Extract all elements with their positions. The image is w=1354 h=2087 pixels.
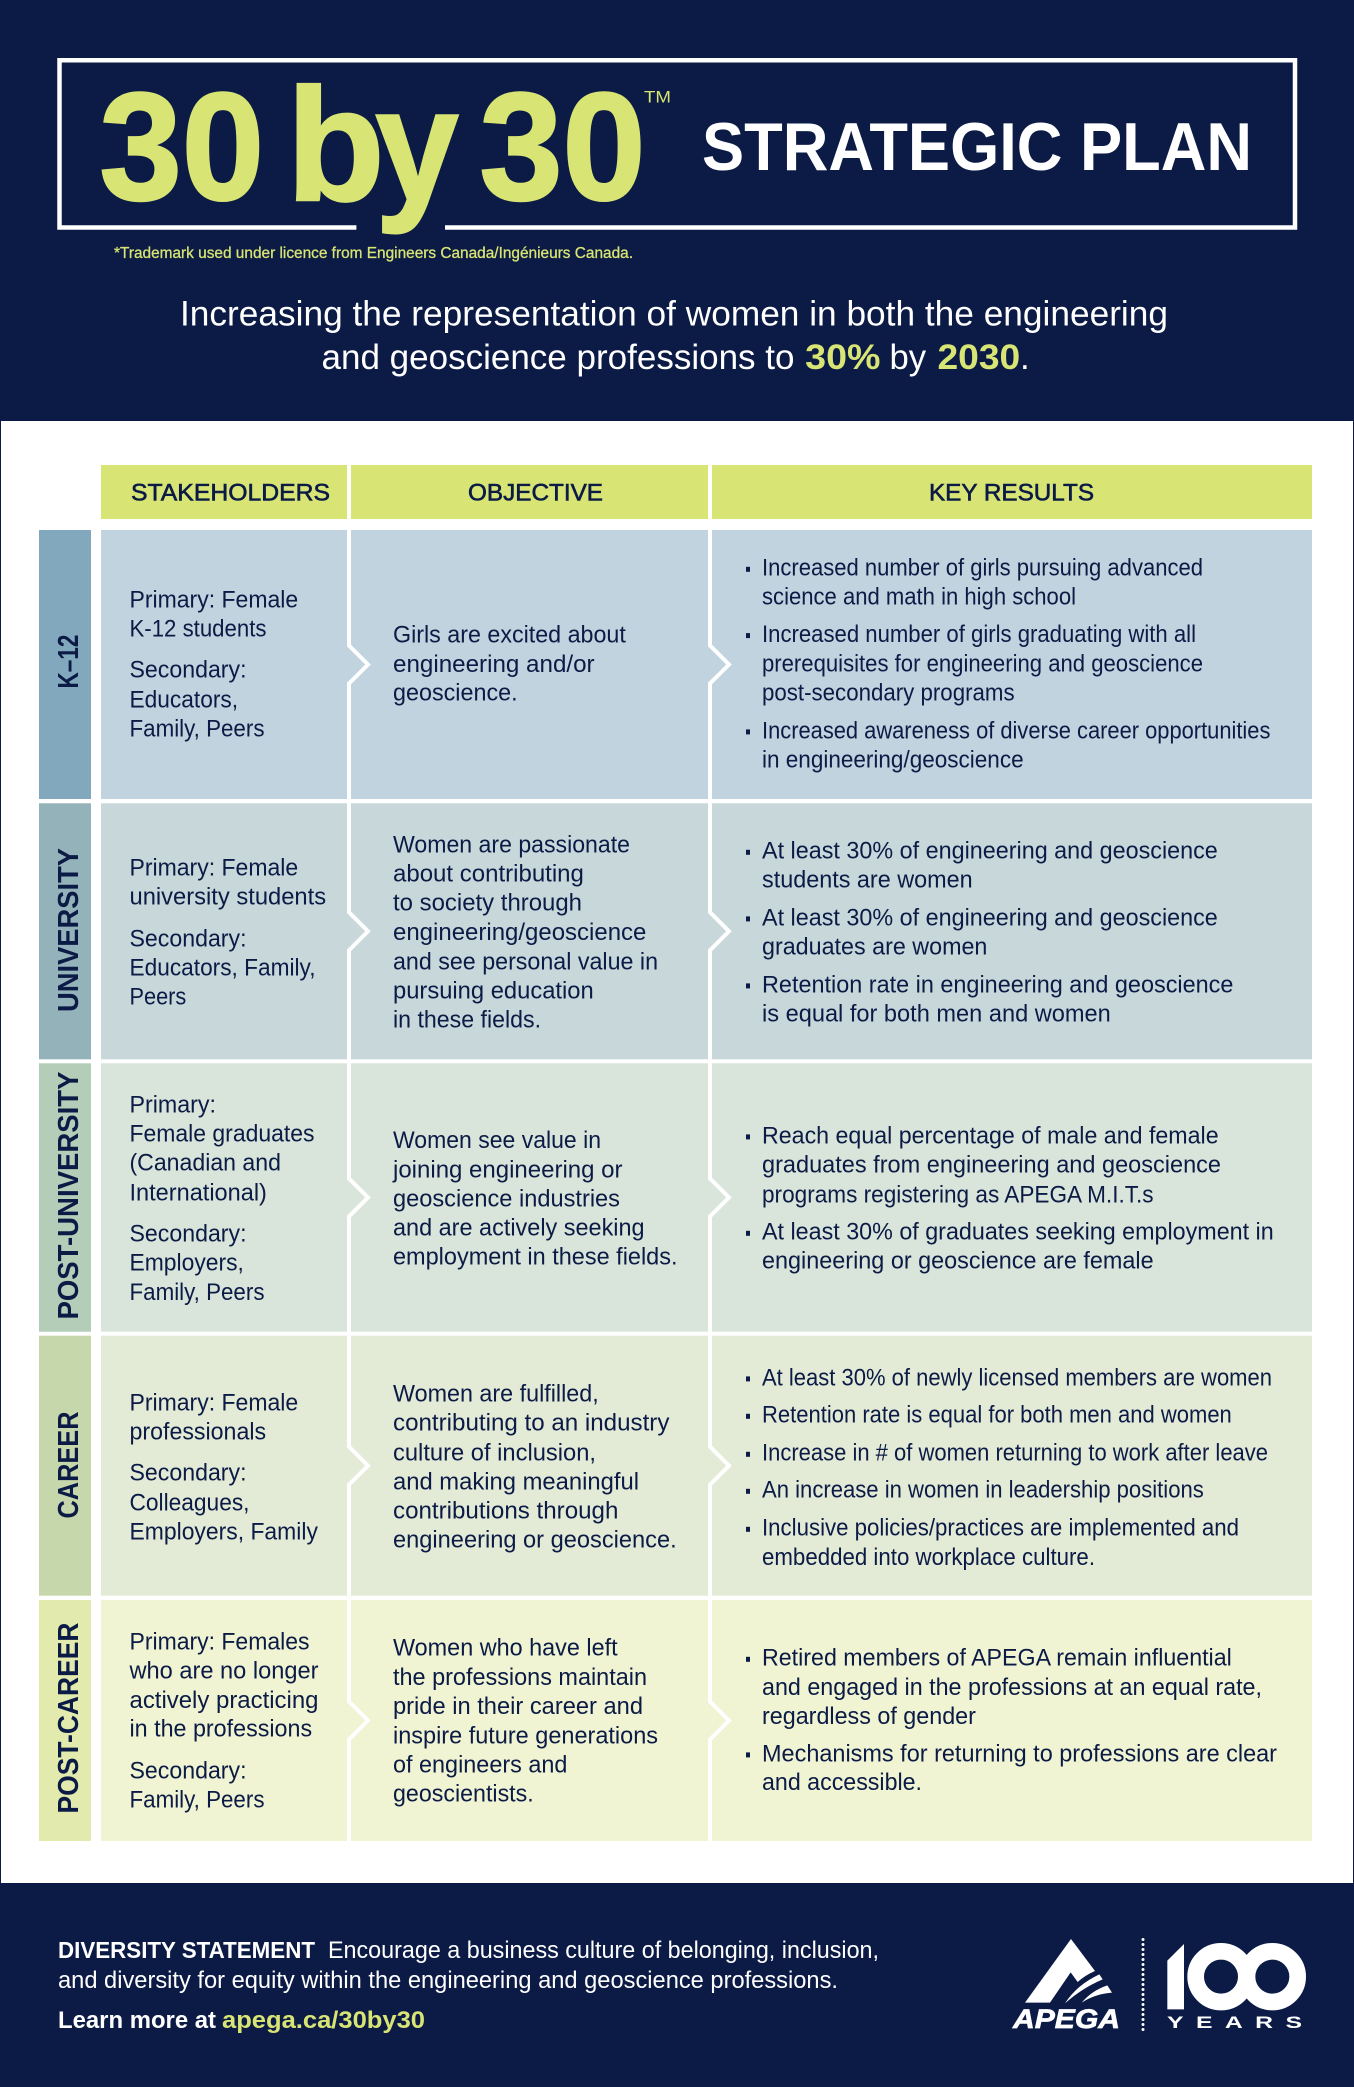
subtitle (180, 294, 1168, 377)
subtitle: 30% (805, 338, 880, 377)
key results list: programs registering as APEGA M.I.T.s (762, 1181, 1154, 1208)
objective text: geoscience industries (393, 1185, 620, 1212)
objective text: pride in their career and (393, 1693, 643, 1720)
key results list: Increased number of girls graduating with all (762, 621, 1196, 648)
stakeholders text: who are no longer (129, 1658, 318, 1685)
subtitle: . (1020, 338, 1030, 377)
stakeholders text (129, 1628, 318, 1814)
row label: Post-Career (39, 1600, 91, 1841)
stakeholders text: professionals (130, 1419, 266, 1446)
trademark note: *Trademark used under licence from Engineers Canada/Ingénieurs Canada. (114, 245, 633, 262)
title: strategic plan: STRATEGIC PLAN (702, 109, 1252, 185)
objective text: contributions through (393, 1498, 618, 1525)
stakeholders text (130, 855, 326, 1010)
title: 30 by 30: 30 (480, 61, 646, 232)
diversity statement: Encourage a business culture of belonging, inclusion, (328, 1937, 879, 1964)
key results list: and accessible. (762, 1769, 922, 1796)
icon: 100 years mark: YEARS (1167, 2014, 1302, 2032)
objective text: Women who have left (393, 1635, 618, 1662)
learn more link: apega.ca/30by30 (222, 2007, 425, 2034)
stakeholders text: Female graduates (130, 1121, 314, 1148)
stakeholders text: Educators, (130, 686, 238, 713)
key results list: Increased awareness of diverse career opportunities (762, 717, 1270, 744)
objective text: the professions maintain (393, 1664, 647, 1691)
stakeholders text: (Canadian and (130, 1150, 281, 1177)
objective text: geoscientists. (393, 1781, 534, 1808)
objective text: Girls are excited about (393, 622, 626, 649)
stakeholders text: Primary: Female (130, 587, 298, 614)
icon: APEGA logo: APEGA (1012, 2004, 1120, 2034)
column header: stakeholders (101, 465, 347, 519)
objective text (392, 1127, 678, 1270)
stakeholders text: Colleagues, (130, 1489, 250, 1516)
column header: objective: OBJECTIVE (468, 479, 603, 506)
key results list: Mechanisms for returning to professions are clear (762, 1740, 1277, 1767)
stakeholders text: Peers (130, 983, 186, 1010)
stakeholders text (130, 1091, 314, 1306)
chevron dividers (349, 803, 729, 1059)
key results list (746, 1364, 1272, 1571)
learn more link: Learn more at (58, 2007, 216, 2034)
diversity statement: and diversity for equity within the engineering and geoscience professions. (58, 1967, 838, 1994)
learn more link (58, 2007, 425, 2034)
subtitle: and geoscience professions to (322, 338, 794, 377)
row label: K-12: K–12 (53, 634, 85, 688)
stakeholders text: actively practicing (130, 1687, 318, 1714)
title: 30 by 30: y (376, 55, 459, 234)
objective text: culture of inclusion, (393, 1440, 596, 1467)
stakeholders text: Secondary: (130, 656, 246, 683)
key results list: students are women (762, 867, 973, 894)
key results list: is equal for both men and women (762, 1000, 1111, 1027)
title: 30 by 30: TM (644, 88, 671, 107)
row label: Post-University: POST-UNIVERSITY (53, 1072, 85, 1320)
key results list: in engineering/geoscience (762, 747, 1024, 774)
key results list: At least 30% of engineering and geoscience (762, 838, 1218, 865)
key results list: regardless of gender (762, 1703, 976, 1730)
stakeholders text: Secondary: (130, 1460, 246, 1487)
stakeholders text (130, 587, 298, 742)
objective text: Women are passionate (393, 831, 630, 858)
row label: Career (39, 1336, 91, 1596)
title: 30 by 30: 30 (100, 61, 264, 232)
subtitle: 2030 (938, 338, 1020, 377)
subtitle: by (890, 338, 927, 377)
stakeholders text: Primary: Females (130, 1628, 310, 1655)
stakeholders text: Employers, (130, 1250, 244, 1277)
cell background (101, 1336, 1312, 1596)
key results list: graduates from engineering and geoscience (762, 1152, 1221, 1179)
stakeholders text: Secondary: (130, 1757, 246, 1784)
key results list: engineering or geoscience are female (762, 1248, 1154, 1275)
stakeholders text: Family, Peers (130, 1787, 264, 1814)
stakeholders text: Primary: Female (130, 855, 298, 882)
objective text: of engineers and (393, 1752, 567, 1779)
diversity statement (58, 1937, 879, 1994)
key results list: Retention rate is equal for both men and women (762, 1402, 1232, 1429)
key results list: science and math in high school (762, 584, 1076, 611)
row: Career (39, 1336, 1312, 1596)
title frame (60, 60, 1295, 228)
stakeholders text: Employers, Family (130, 1519, 318, 1546)
column header: objective (351, 465, 708, 519)
key results list: Increased number of girls pursuing advanced (762, 555, 1203, 582)
title: 30 by 30: b (287, 55, 385, 234)
stakeholders text: Primary: Female (130, 1389, 298, 1416)
stakeholders text: Secondary: (130, 926, 246, 953)
key results list (746, 1122, 1274, 1275)
objective text (393, 1635, 658, 1808)
stakeholders text: Educators, Family, (130, 955, 316, 982)
key results list: An increase in women in leadership positions (762, 1477, 1204, 1504)
stakeholders text: K-12 students (130, 616, 266, 643)
cell background (101, 803, 1312, 1059)
row: Post-Career (39, 1600, 1312, 1841)
objective text: engineering and/or (393, 651, 595, 678)
stakeholders text: university students (130, 884, 326, 911)
stakeholders text: Secondary: (130, 1220, 246, 1247)
objective text: engineering/geoscience (393, 919, 646, 946)
white table panel (1, 421, 1353, 1883)
objective text: and are actively seeking (393, 1215, 645, 1242)
stakeholders text: in the professions (130, 1716, 312, 1743)
cell background (101, 1600, 1312, 1841)
key results list: prerequisites for engineering and geoscience (762, 650, 1203, 677)
row label: Post-Career: POST-CAREER (53, 1622, 85, 1814)
objective text: and see personal value in (393, 949, 658, 976)
key results list: embedded into workplace culture. (762, 1544, 1095, 1571)
icon: APEGA logo (1012, 1939, 1120, 2034)
objective text: contributing to an industry (393, 1410, 669, 1437)
chevron dividers (349, 1336, 729, 1596)
table header row (101, 465, 1312, 519)
key results list (746, 838, 1233, 1027)
icon: 100 years mark (1167, 1944, 1302, 2032)
key results list: graduates are women (762, 933, 987, 960)
stakeholders text: Family, Peers (130, 715, 264, 742)
diversity statement: DIVERSITY STATEMENT (58, 1937, 315, 1963)
column header: stakeholders: STAKEHOLDERS (131, 479, 330, 506)
chevron dividers (349, 530, 729, 799)
key results list: Retention rate in engineering and geoscience (762, 971, 1233, 998)
row: Post-University (39, 1063, 1312, 1332)
row label: Career: CAREER (53, 1411, 85, 1518)
objective text: pursuing education (393, 977, 594, 1004)
key results list: At least 30% of graduates seeking employment in (762, 1219, 1274, 1246)
objective text: geoscience. (393, 680, 518, 707)
row label: University: UNIVERSITY (53, 848, 85, 1012)
stakeholders text: International) (130, 1179, 267, 1206)
title: 30 by 30 (100, 55, 671, 234)
objective text: employment in these fields. (393, 1243, 678, 1270)
objective text: Women are fulfilled, (393, 1381, 599, 1408)
key results list: and engaged in the professions at an equal rate, (762, 1674, 1262, 1701)
objective text: joining engineering or (392, 1156, 623, 1183)
key results list: At least 30% of engineering and geoscience (762, 904, 1218, 931)
cell background (101, 1063, 1312, 1332)
row label: Post-University (39, 1063, 91, 1332)
subtitle: Increasing the representation of women in both the engineering (180, 294, 1168, 333)
footer (58, 1937, 1302, 2034)
objective text (393, 1381, 677, 1553)
objective text (393, 622, 626, 707)
objective text: inspire future generations (393, 1722, 658, 1749)
cell background (101, 530, 1312, 799)
row: K-12 (39, 530, 1312, 799)
objective text: and making meaningful (393, 1469, 639, 1496)
column header: key results: KEY RESULTS (929, 479, 1094, 506)
key results list: Reach equal percentage of male and female (762, 1122, 1219, 1149)
row: University (39, 803, 1312, 1059)
stakeholders text: Family, Peers (130, 1279, 264, 1306)
key results list (746, 1645, 1277, 1796)
key results list (746, 555, 1270, 774)
objective text: Women see value in (393, 1127, 601, 1154)
stakeholders text: Primary: (130, 1091, 216, 1118)
header banner (60, 55, 1295, 377)
objective text: about contributing (393, 861, 584, 888)
row label: K-12 (39, 530, 91, 799)
row label: University (39, 803, 91, 1059)
key results list: post-secondary programs (762, 679, 1015, 706)
dotted divider (1142, 1940, 1144, 2030)
column header: key results (712, 465, 1312, 519)
key results list: Retired members of APEGA remain influential (762, 1645, 1232, 1672)
key results list: At least 30% of newly licensed members are women (762, 1364, 1272, 1391)
key results list: Increase in # of women returning to work after leave (762, 1440, 1268, 1467)
stakeholders text (130, 1389, 318, 1546)
objective text (393, 831, 658, 1033)
objective text: engineering or geoscience. (393, 1526, 677, 1553)
key results list: Inclusive policies/practices are implemented and (762, 1515, 1239, 1542)
objective text: to society through (393, 889, 582, 916)
objective text: in these fields. (393, 1006, 541, 1033)
chevron dividers (349, 1063, 729, 1332)
chevron dividers (349, 1600, 729, 1841)
